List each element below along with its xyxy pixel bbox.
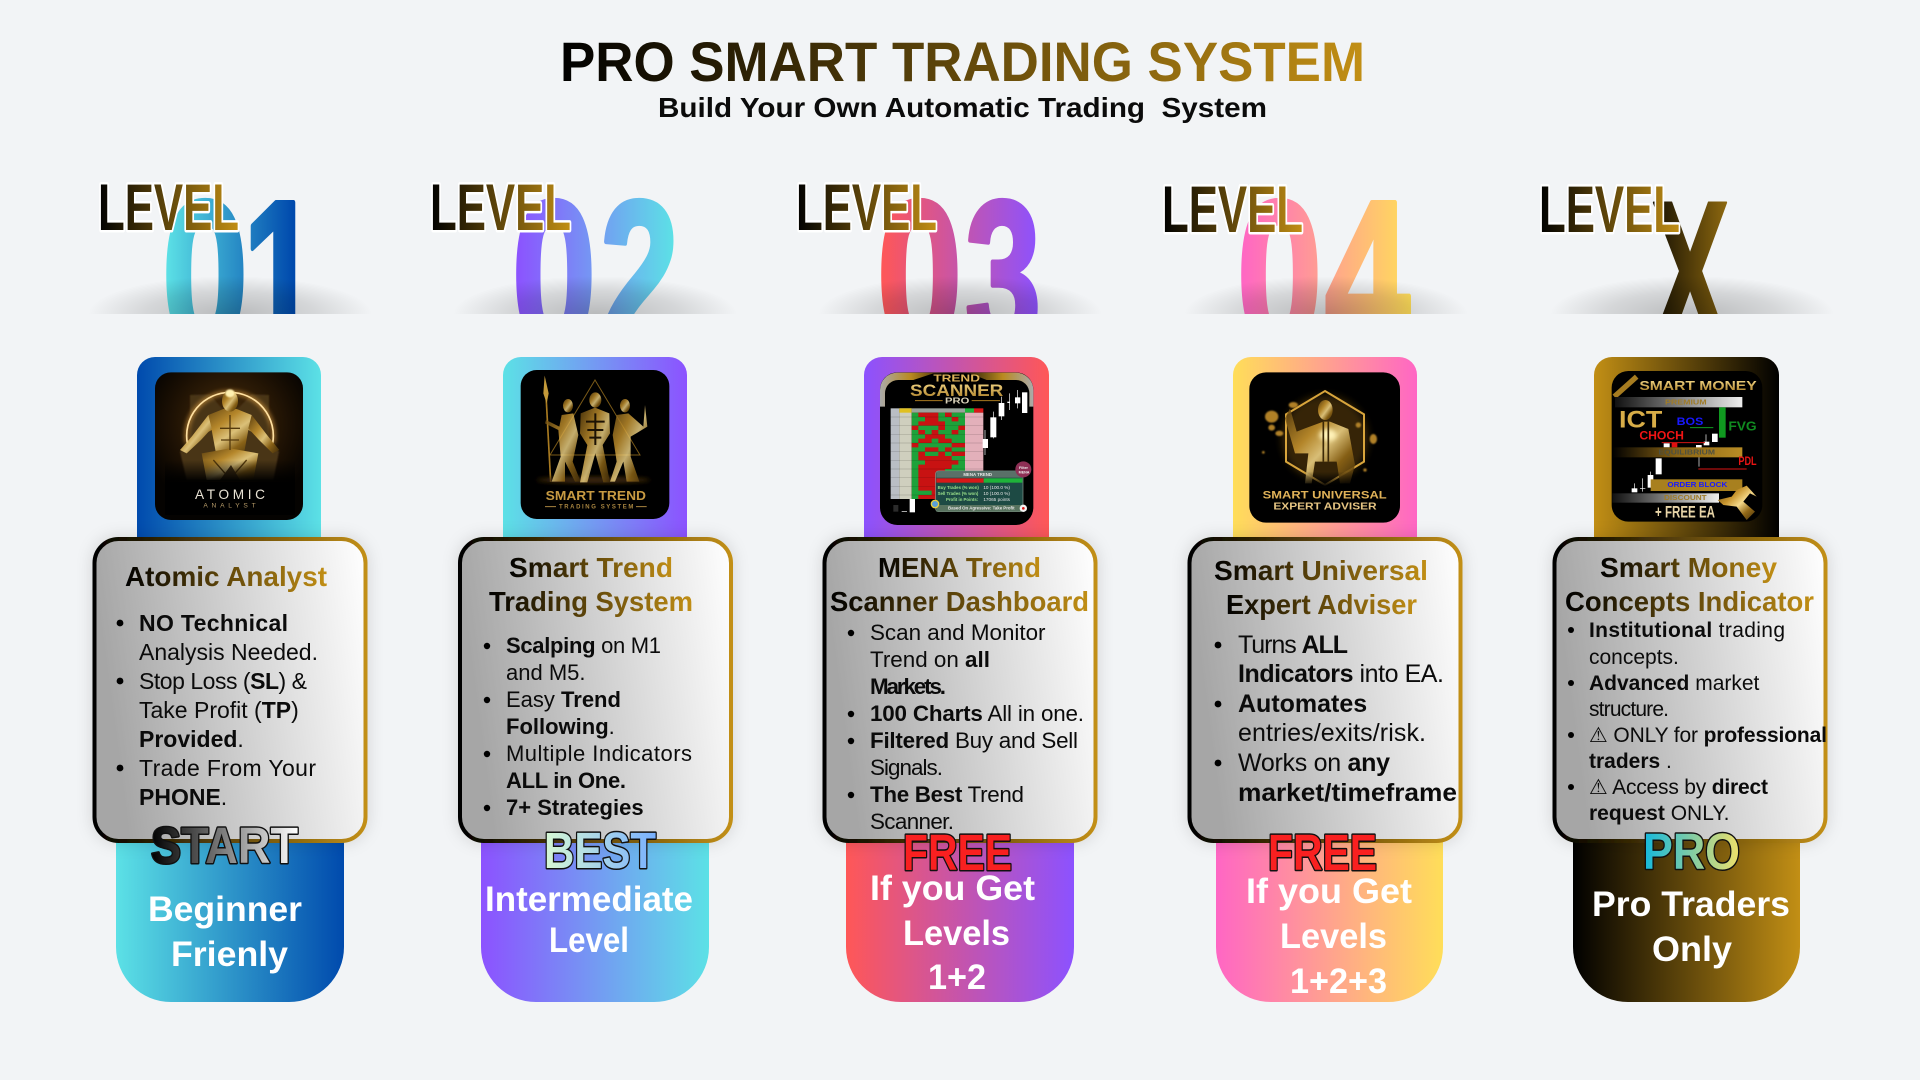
card title [830, 552, 1089, 617]
tab label: Pro Traders [1592, 885, 1790, 924]
feature list: NO Technical [139, 610, 288, 636]
level 03 heading: 3 [965, 157, 1041, 392]
feature list: ⚠ Access by direct [1589, 776, 1768, 799]
product image: Smart Money [1612, 371, 1762, 522]
title: PRO SMART TRADING SYSTEM [560, 30, 1365, 93]
badge: PRO: PRO [1643, 823, 1740, 880]
card title: Smart Trend [509, 552, 673, 583]
level 01 heading: 1 [243, 157, 319, 392]
product image: Smart Money: + FREE EA [1655, 503, 1715, 522]
card title: Concepts Indicator [1565, 586, 1814, 617]
card title: Trading System [489, 586, 693, 617]
feature list: entries/exits/risk. [1238, 719, 1426, 747]
level 03 heading [798, 182, 1086, 314]
feature list: 7+ Strategies [506, 795, 644, 820]
info card 4 [1190, 539, 1460, 841]
feature list: concepts. [1589, 646, 1679, 669]
bottom tab level 3 [846, 820, 1074, 1002]
card title: Scanner Dashboard [830, 586, 1089, 617]
tab label [1246, 872, 1412, 1001]
feature list: Filtered Buy and Sell [870, 728, 1078, 753]
product image: Trend Scanner: Filter [1019, 466, 1029, 470]
top tab level X [1594, 357, 1779, 560]
top tab level 1 [137, 357, 321, 560]
product image: Smart Money: ORDER BLOCK [1667, 480, 1728, 489]
MENA trend panel: Buy Trades (% won) [938, 485, 979, 490]
product image: Trend Scanner: SCANNER [910, 381, 1003, 400]
card title: Atomic Analyst [125, 561, 327, 592]
feature list [484, 633, 692, 820]
product image: Trend Scanner: PRO [945, 396, 970, 406]
feature list: market/timeframe [1238, 779, 1457, 807]
product image: Smart Universal: EXPERT ADVISER [1273, 501, 1377, 512]
MENA trend panel [936, 471, 1023, 512]
top tab level 2 [503, 357, 687, 560]
info card 5 [1554, 539, 1827, 841]
product image: Smart Trend: TRADING SYSTEM [559, 505, 633, 511]
info card 1 [94, 539, 366, 841]
product image: Atomic Analyst [155, 372, 303, 520]
MENA trend panel: 10 (100.0 %) [983, 485, 1010, 490]
product image: Smart Money: CHOCH [1639, 429, 1684, 442]
card title [1565, 552, 1814, 617]
card title: MENA Trend [878, 552, 1041, 583]
feature list: Scanner. [870, 809, 954, 834]
product image: Atomic Analyst: ATOMIC [195, 487, 265, 502]
tab label: Beginner [148, 890, 302, 929]
product image: Smart Trend: SMART TREND [546, 488, 646, 503]
feature list: Analysis Needed. [139, 639, 318, 665]
feature list: Automates [1238, 690, 1367, 718]
feature list: Works on any [1238, 749, 1390, 777]
product image: Smart Universal [1249, 372, 1400, 523]
product image: Smart Money: BOS [1677, 416, 1703, 428]
feature list: Advanced market [1589, 672, 1760, 695]
level 04 heading [1164, 184, 1452, 314]
bottom tab level 4 [1216, 820, 1443, 1002]
subtitle: Build Your Own Automatic Trading System [658, 92, 1267, 123]
feature list: Easy Trend [506, 687, 621, 712]
tab label: Intermediate [485, 880, 693, 919]
feature list: ALL in One. [506, 768, 626, 793]
badge: START: START [151, 817, 298, 874]
feature list: request ONLY. [1589, 802, 1729, 825]
tab label: Levels [1280, 917, 1387, 956]
product image: Atomic Analyst: ANALYST [203, 503, 256, 510]
level X heading [1540, 184, 1818, 314]
level 02 heading: 0 [512, 157, 596, 392]
product image: Trend Scanner [880, 372, 1033, 525]
tab label: 1+2+3 [1290, 962, 1387, 1001]
tab label: Levels [903, 914, 1010, 953]
feature list: Provided. [139, 726, 244, 752]
level 01 heading: 0 [162, 157, 248, 392]
tab label [485, 880, 693, 960]
card title [489, 552, 693, 617]
badge: FREE: FREE [903, 824, 1012, 881]
feature list: Signals. [870, 755, 943, 780]
column 3: MENA Trend [824, 357, 1096, 1002]
feature list [848, 620, 1084, 834]
product image: Smart Universal: SMART UNIVERSAL [1263, 489, 1387, 501]
info card 2 [460, 539, 731, 841]
heat map table [891, 408, 983, 499]
product image: Smart Trend [521, 370, 669, 519]
level 04 heading: 4 [1325, 157, 1410, 392]
level 02 heading: LEVEL [430, 170, 571, 244]
top tab level 4 [1233, 357, 1417, 560]
column 1: Atomic Analyst [94, 357, 366, 1002]
level 03 heading: LEVEL [796, 170, 937, 244]
feature list: structure. [1589, 698, 1669, 721]
level 04 heading: 0 [1237, 157, 1322, 392]
bottom tab level 2 [481, 820, 709, 1002]
level 01 heading [100, 182, 356, 314]
product image: Smart Money: FVG [1728, 420, 1757, 434]
bottom tab level X [1573, 820, 1800, 1002]
feature list: Indicators into EA. [1238, 660, 1444, 688]
feature list: PHONE. [139, 784, 227, 810]
feature list: and M5. [506, 660, 586, 685]
info card 3 [824, 539, 1096, 841]
level 02 heading: 2 [600, 157, 679, 392]
MENA trend panel: Profit in Points: [946, 497, 979, 502]
bottom tab level 1 [116, 820, 344, 1002]
MENA trend panel: MENA TREND [963, 472, 992, 477]
feature list: Stop Loss (SL) & [139, 668, 307, 694]
level X heading: LEVEL [1539, 172, 1680, 246]
level 04 heading: LEVEL [1162, 172, 1303, 246]
badge: FREE: FREE [1268, 824, 1377, 881]
tab label [148, 890, 302, 974]
level 03 heading: 0 [877, 157, 962, 392]
feature list [117, 610, 318, 810]
column 2: Smart Trend [460, 357, 731, 1002]
column 4: Smart Universal [1190, 357, 1460, 1002]
product image: Smart Money: PREMIUM [1665, 397, 1707, 406]
card title: Smart Money [1600, 552, 1777, 583]
feature list: Institutional trading [1589, 619, 1785, 642]
feature list: Turns ALL [1238, 631, 1348, 659]
card title: Expert Adviser [1226, 589, 1417, 620]
tab label: Only [1652, 930, 1733, 969]
product image: Smart Money: EQUILIBRIUM [1658, 447, 1715, 456]
product image: Trend Scanner: TREND [933, 374, 980, 385]
tab label: 1+2 [928, 958, 986, 997]
feature list: Multiple Indicators [506, 741, 692, 766]
feature list: Take Profit (TP) [139, 697, 299, 723]
tab label [870, 869, 1035, 997]
product image: Smart Money: ICT [1619, 407, 1663, 434]
product image: Smart Money: DISCOUNT [1664, 493, 1707, 502]
feature list: Scalping on M1 [506, 633, 661, 658]
feature list: Markets. [870, 674, 946, 699]
level 02 heading [432, 182, 720, 314]
card title: Smart Universal [1214, 555, 1428, 586]
tab label: If you Get [870, 869, 1035, 908]
product image: Smart Money: PDL [1738, 454, 1757, 468]
column 5: Smart Money [1554, 357, 1827, 1002]
MENA trend panel: 10 (100.0 %) [983, 491, 1010, 496]
tab label: Frienly [171, 935, 289, 974]
level X heading: X [1650, 157, 1730, 392]
feature list [1215, 631, 1457, 807]
product image: Smart Money: SMART MONEY [1639, 379, 1757, 393]
feature list: traders . [1589, 750, 1672, 773]
tab label: Level [549, 921, 629, 960]
MENA trend panel: Based On Agressive: Take Profit [948, 506, 1015, 511]
feature list: 100 Charts All in one. [870, 701, 1084, 726]
feature list: ⚠ ONLY for professional [1589, 724, 1827, 747]
MENA trend panel: Sell Trades (% won) [938, 491, 979, 496]
product image: Trend Scanner: MENA [1019, 470, 1030, 474]
card title [1214, 555, 1428, 620]
feature list: Trend on all [870, 647, 990, 672]
feature list: Following. [506, 714, 615, 739]
MENA trend panel: 17065 points [983, 497, 1011, 502]
top tab level 3 [864, 357, 1049, 560]
badge: BEST: BEST [544, 822, 656, 879]
feature list: The Best Trend [870, 782, 1024, 807]
tab label [1592, 885, 1790, 969]
feature list [1568, 619, 1827, 825]
feature list: Scan and Monitor [870, 620, 1046, 645]
tab label: If you Get [1246, 872, 1412, 911]
feature list: Trade From Your [139, 755, 316, 781]
level 01 heading: LEVEL [98, 170, 239, 244]
